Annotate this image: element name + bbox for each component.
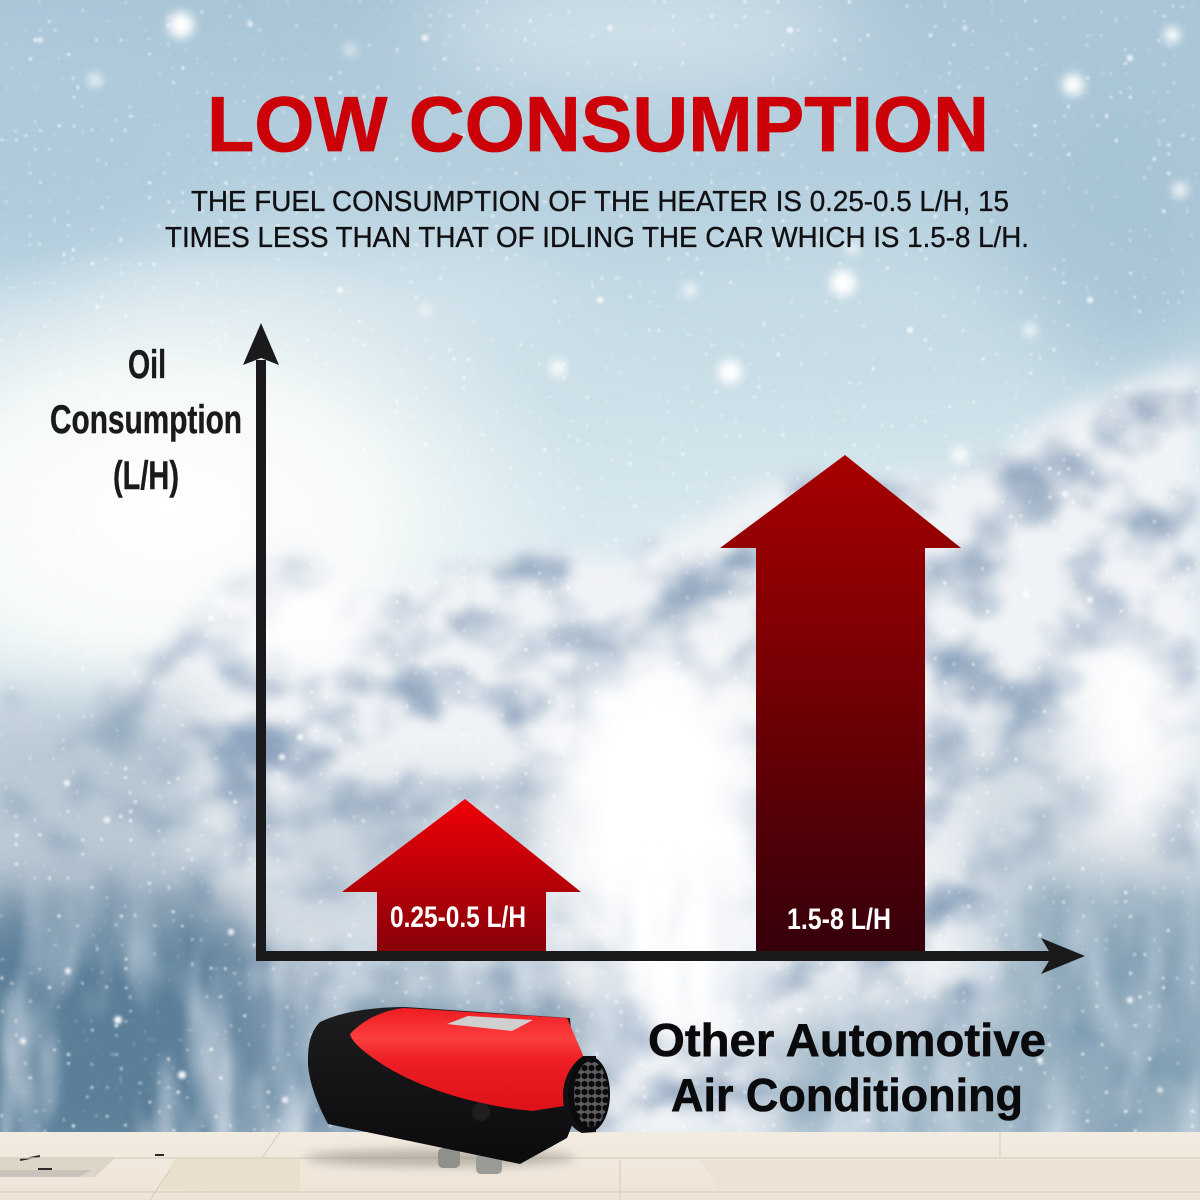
heater grille [563,1056,610,1133]
lower slope streaks [0,878,1200,1132]
snowflakes [89,12,1187,463]
description text: TIMES LESS THAN THAT OF IDLING THE CAR WHICH IS 1.5-8 L/H. [165,222,1029,254]
description text: THE FUEL CONSUMPTION OF THE HEATER IS 0.25-0.5 L/H, 15 [191,186,1009,218]
y-axis label [50,343,242,498]
heater red cover [350,1008,583,1111]
heater shadow [305,1149,575,1167]
bar value: heater: 0.25-0.5 L/H [390,901,526,934]
y-axis label: Oil [128,343,166,387]
heater button [472,1103,490,1121]
y-axis label: Consumption [50,398,242,442]
category label: other automotive air conditioning [648,1014,1046,1121]
title: LOW CONSUMPTION [207,80,989,168]
chart axes with arrowheads [243,323,1085,974]
heater black body [308,1007,578,1164]
floor planks [0,1132,1200,1200]
mountain silhouette [158,357,1200,1132]
icon: red and black diesel heater [305,1007,610,1174]
category label: other automotive air conditioning: Other Automotive [648,1014,1046,1066]
bar: heater 0.25-0.5 L/H [342,799,581,951]
y-axis label: (L/H) [113,454,179,498]
heater feet [438,1148,460,1168]
bright glow on the left [0,270,522,702]
mountain rock texture [0,363,1200,1140]
bar value: other: 1.5-8 L/H [787,903,891,936]
category label: other automotive air conditioning: Air Conditioning [671,1069,1023,1121]
heater label [447,1016,533,1031]
bar: other air conditioning 1.5-8 L/H [720,455,961,951]
description text [165,186,1029,254]
